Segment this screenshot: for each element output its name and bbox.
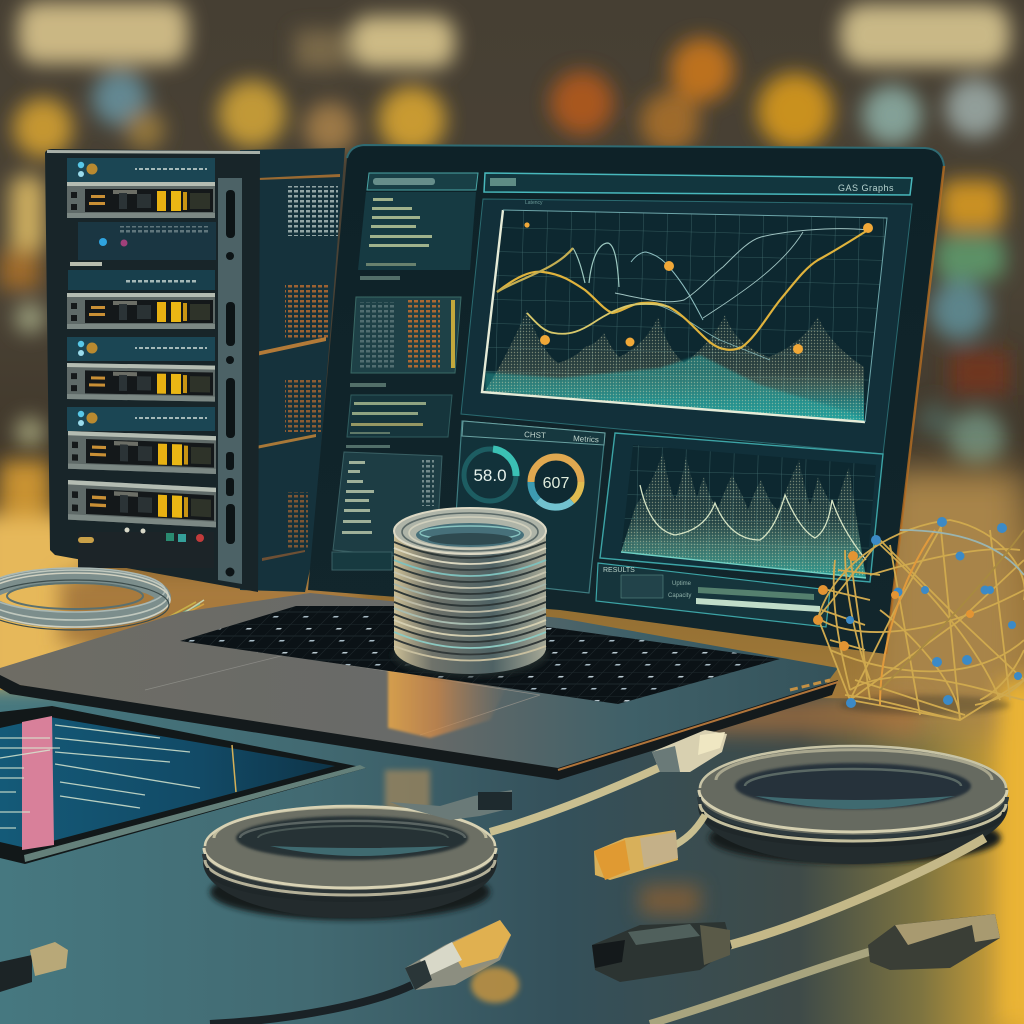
blurred background with bokeh lights: [0, 0, 1024, 720]
gauge: 58.0: 58.0: [473, 466, 507, 485]
main line chart panel: Latency: [525, 200, 543, 206]
bottom left connector: [0, 942, 68, 992]
grey cable with black connector: [592, 838, 985, 982]
gauge panel header: [462, 421, 605, 445]
mesh area: [485, 310, 864, 422]
main line chart panel: [461, 199, 912, 454]
gauge: 607: [531, 457, 581, 507]
bottom right cable and connector: [650, 914, 1000, 1024]
laptop: [0, 145, 944, 780]
secondary mesh chart panel: [600, 433, 883, 582]
multicoloured wire ends: [156, 600, 204, 624]
data markers: [524, 222, 873, 354]
dashboard sidebar: [332, 173, 478, 570]
laptop base: [0, 593, 838, 780]
ethernet cable left coil: [203, 805, 497, 920]
rack front frame: [45, 149, 260, 592]
tablet: [0, 706, 366, 864]
gauge: 58.0: [464, 449, 516, 501]
server units: [67, 158, 216, 568]
bottom status panel: Capacity: [668, 593, 691, 599]
dashboard top bar: [484, 173, 912, 195]
dark connector behind left coil: [390, 790, 512, 820]
gauge panel header: Metrics: [573, 434, 599, 444]
small cable coil behind laptop on left: [0, 568, 204, 630]
bottom status panel: RESULTS: [603, 567, 635, 574]
server rack: [45, 148, 345, 592]
bottom status panel: Uptime: [672, 581, 692, 587]
bottom center connector: [210, 920, 519, 1024]
gauge panel: [452, 421, 605, 593]
orange ethernet connector: [594, 815, 705, 880]
chart lines: [497, 229, 868, 360]
gauge: 607: 607: [543, 475, 569, 492]
cable to top connector: [490, 730, 727, 832]
bottom status panel: [596, 563, 830, 627]
trackpad seam: [145, 655, 540, 735]
orange reflection on palm rest: [388, 668, 510, 738]
ethernet cable right coil: [698, 745, 1008, 864]
mesh peaks: [621, 452, 866, 578]
laptop lid and display: [308, 145, 944, 654]
dashboard top bar: GAS Graphs: [838, 183, 894, 193]
keyboard: [180, 606, 780, 704]
gauge panel header: CHST: [524, 430, 546, 440]
rack rail: [218, 178, 242, 584]
rack side panel: [240, 148, 345, 592]
wire network sphere: [813, 517, 1024, 720]
stacked cable coil on keyboard: [392, 508, 548, 677]
rack top edge: [47, 150, 260, 154]
chart border: [482, 210, 865, 422]
desk surface: [0, 470, 1024, 1024]
